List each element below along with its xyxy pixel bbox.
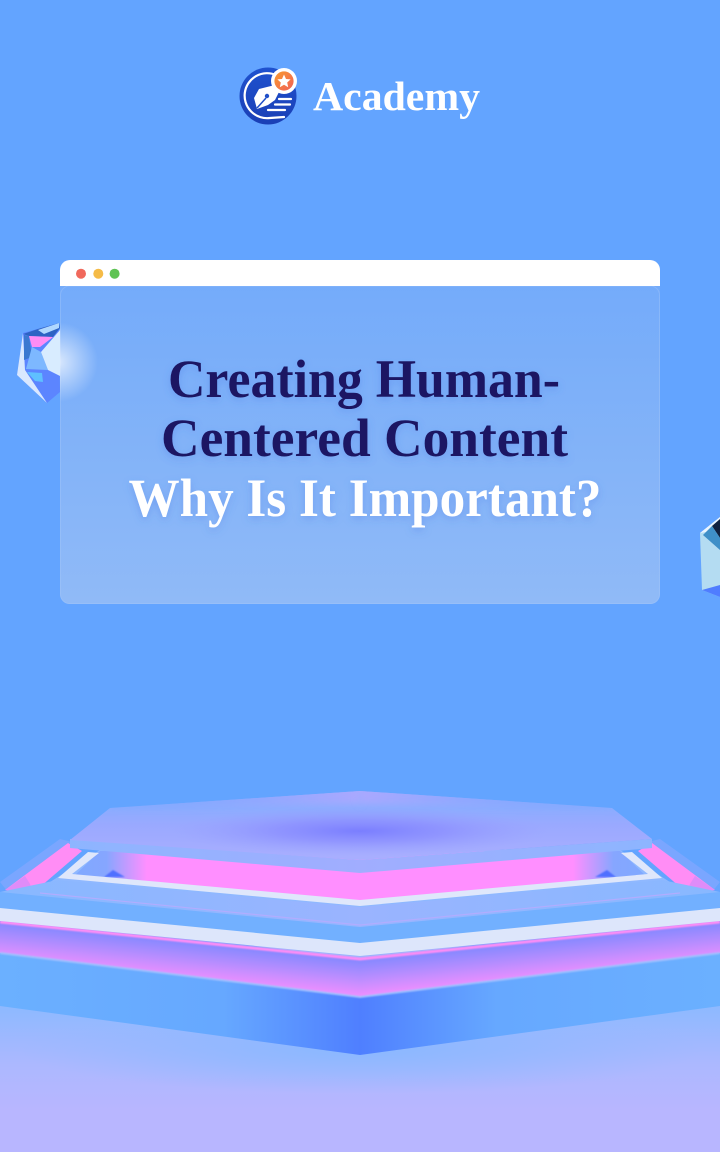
band highlight (0, 953, 720, 997)
window title bar (60, 260, 660, 286)
blue ledge (0, 892, 720, 944)
panel: browser window (18, 260, 660, 604)
right corner fold (687, 876, 715, 893)
top slab surface (70, 791, 652, 860)
icon: left crystal (17, 323, 60, 403)
lower step surface (0, 850, 720, 960)
purple band right (360, 921, 720, 997)
pink inner ring (72, 851, 648, 902)
icon: pen nib badge (240, 68, 297, 124)
pink right corner (638, 843, 715, 893)
heading: Why Is It Important? (128, 468, 602, 528)
right ring notch (595, 870, 616, 877)
pink left corner (5, 843, 82, 893)
lavender band (0, 880, 720, 932)
purple band left (0, 921, 360, 997)
thin step line (40, 893, 680, 925)
panel glow (60, 326, 94, 398)
logo (240, 68, 481, 124)
icon: right crystal (700, 517, 720, 597)
slab centre shadow (170, 807, 550, 855)
inner white rim (58, 852, 662, 906)
heading: Creating Human- (168, 349, 560, 409)
floor (0, 1000, 720, 1152)
left ring notch (104, 870, 125, 877)
white band (0, 908, 720, 956)
illustration: podium (0, 786, 720, 1152)
floor reflection (20, 1006, 700, 1094)
blue front band right (360, 953, 720, 1055)
top slab front (70, 839, 652, 873)
podium rear left edge (0, 839, 72, 892)
podium rear right edge (648, 839, 720, 892)
left corner fold (5, 876, 33, 893)
pink glow line (0, 922, 720, 959)
logo wordmark: Academy (313, 73, 481, 119)
slab back tint (140, 791, 579, 806)
blue front band left (0, 953, 360, 1055)
heading (128, 349, 602, 528)
heading: Centered Content (161, 408, 568, 468)
